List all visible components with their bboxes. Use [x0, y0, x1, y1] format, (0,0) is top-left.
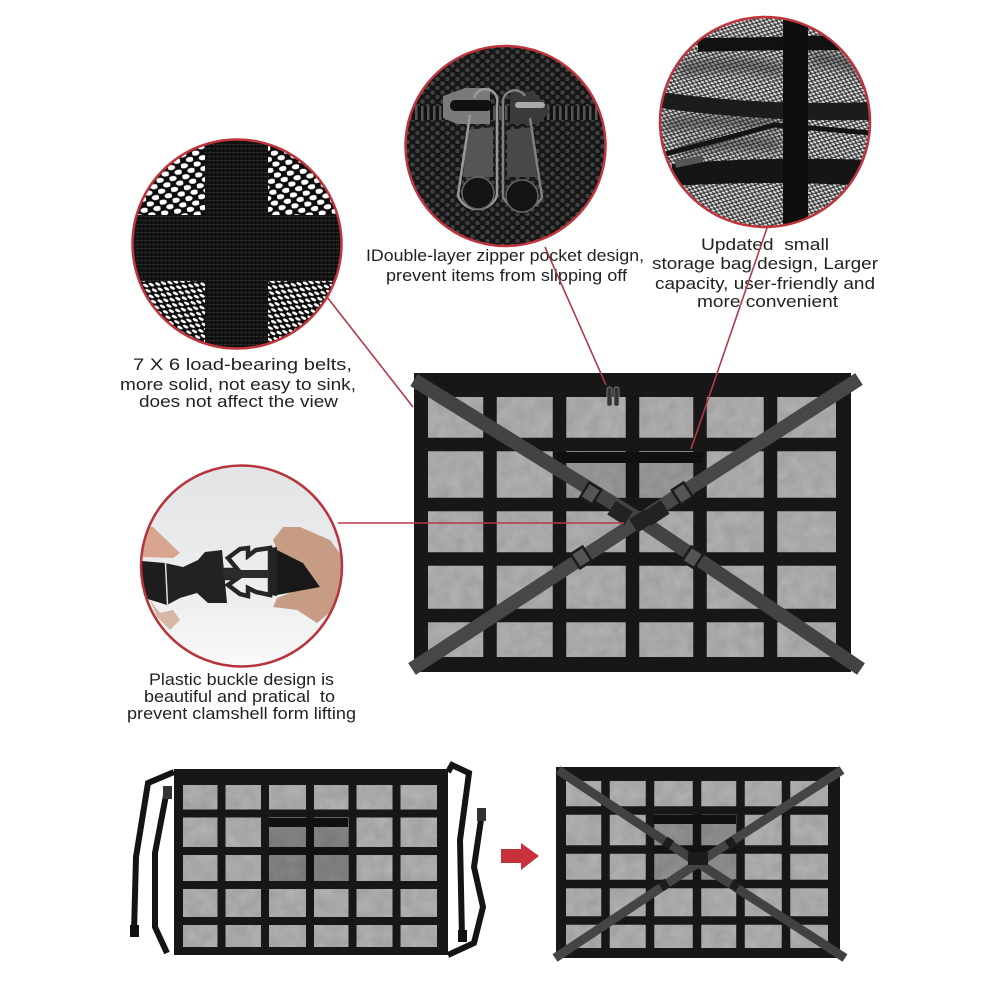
icon: right zipper pull: [503, 90, 542, 212]
loose right straps: [448, 765, 483, 955]
crossed straps on small net: [558, 770, 845, 958]
caption: storage bag: storage bag design, Larger: [652, 254, 878, 273]
caption: zipper pocket: [366, 246, 644, 285]
left fingers: [143, 527, 180, 558]
caption: zipper pocket: prevent items from slipping off: [386, 266, 627, 285]
caption: zipper pocket: IDouble-layer zipper pocket design,: [366, 246, 644, 265]
circle detail: small storage bag: [658, 15, 872, 229]
right hand: [273, 527, 345, 623]
red arrow: [501, 843, 539, 870]
caption: load-bearing belts: more solid, not easy to sink,: [120, 375, 356, 394]
crossed straps with buckles: [412, 379, 861, 669]
circle detail: plastic buckle: [140, 464, 345, 668]
icon: left zipper pull: [458, 89, 497, 209]
net before straps attached: [130, 765, 486, 955]
loose left straps: [134, 772, 174, 953]
caption: plastic buckle: beautiful and pratical to: [144, 687, 335, 706]
caption: load-bearing belts: does not affect the view: [139, 392, 339, 411]
caption: storage bag: Updated small: [701, 235, 829, 254]
buckle female end: [141, 561, 167, 605]
caption: plastic buckle: [127, 670, 356, 723]
caption: storage bag: [652, 235, 878, 311]
buckle male end: [224, 548, 270, 596]
caption: load-bearing belts: 7 X 6 load-bearing belts,: [133, 355, 352, 374]
icon: zipper pull on main net: [607, 387, 619, 406]
net with straps crossed: [555, 767, 845, 958]
caption: storage bag: capacity, user-friendly and: [655, 274, 875, 293]
caption: plastic buckle: prevent clamshell form lifting: [127, 704, 356, 723]
main cargo net: [414, 373, 851, 672]
red leader lines: [327, 228, 767, 523]
caption: plastic buckle: Plastic buckle design is: [149, 670, 334, 689]
circle detail: load-bearing belts: [130, 138, 345, 350]
caption: storage bag: more convenient: [697, 292, 838, 311]
circle detail: double zipper: [404, 45, 608, 249]
caption: load-bearing belts: [120, 355, 356, 411]
